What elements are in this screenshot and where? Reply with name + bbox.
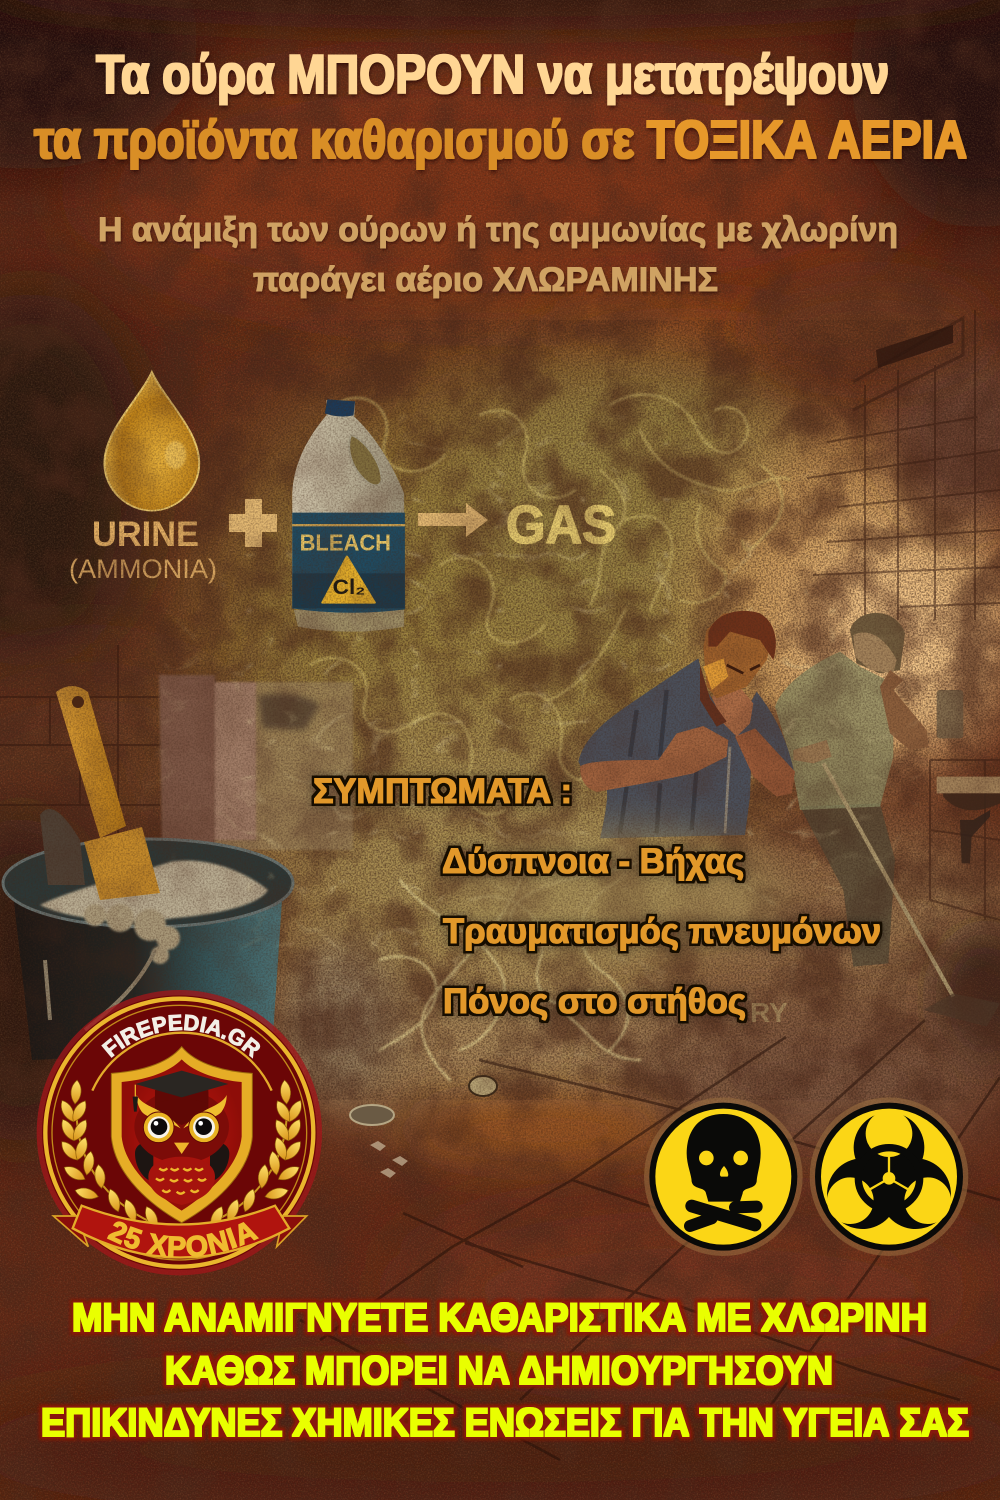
badge arc: [92, 1033, 272, 1091]
warning text: [41, 1296, 969, 1445]
ribbon text: 25 ΧΡΟΝΙΑ: [107, 1221, 259, 1257]
warning text: ΚΑΘΩΣ ΜΠΟΡΕΙ ΝΑ ΔΗΜΙΟΥΡΓΗΣΟΥΝ: [165, 1349, 833, 1393]
warning text: ΜΗΝ ΑΝΑΜΙΓΝΥΕΤΕ ΚΑΘΑΡΙΣΤΙΚΑ ΜΕ ΧΛΩΡΙΝΗ: [72, 1296, 927, 1340]
symptom: lung injury: Τραυματισμός πνευμόνων: [443, 912, 881, 951]
title: τα προϊόντα καθαρισμού σε ΤΟΞΙΚΑ ΑΕΡΙΑ: [34, 110, 967, 170]
arrow: [418, 503, 488, 537]
subtitle: Η ανάμιξη των ούρων ή της αμμωνίας με χλωρίνη: [98, 211, 898, 249]
symptom: chest pain: Πόνος στο στήθος: [443, 982, 746, 1021]
smoke veil over lower worker: [455, 830, 785, 960]
label: urine ammonia: URINE: [92, 515, 199, 554]
label: urine ammonia: (AMMONIA): [69, 554, 217, 584]
floor tiles: [300, 1020, 1000, 1460]
symptoms heading: ΣΥΜΠΤΩΜΑΤΑ :: [313, 772, 572, 811]
title: [34, 43, 967, 170]
badge: Firepedia 25 years: [36, 990, 322, 1276]
label: gas: GAS: [506, 495, 616, 555]
wall vent: [876, 325, 953, 368]
icon: bleach bottle: Cl₂: [333, 575, 365, 599]
icon: bleach bottle: [292, 399, 405, 632]
sink and fixtures on the right: [937, 690, 1000, 863]
urinal on the wall: [159, 675, 353, 850]
faint floor lettering: RY: [750, 997, 788, 1028]
subtitle: παράγει αέριο ΧΛΩΡΑΜΙΝΗΣ: [253, 261, 718, 299]
left wall tiles: [0, 645, 160, 850]
icon: urine drop: [104, 372, 199, 511]
symptom: dyspnea and cough: Δύσπνοια - Βήχας: [442, 842, 744, 881]
subtitle: [98, 211, 898, 299]
plus sign: [229, 499, 277, 547]
graduation cap: [133, 1071, 228, 1112]
wall tiles on the right: [807, 310, 1000, 920]
icon: bleach bottle: BLEACH: [300, 529, 391, 556]
symptoms list: [313, 772, 881, 1021]
badge name: FIREPEDIA.GR: [101, 1014, 260, 1059]
laurel wreath: [58, 1080, 305, 1232]
bright smoke curls over the floor: [380, 850, 660, 1080]
object grain overlay: [0, 320, 1000, 1100]
owl mascot: [134, 1090, 229, 1205]
front worker coughing: [578, 611, 795, 838]
icon: biohazard: [810, 1097, 968, 1256]
floor debris and pebbles: [350, 1076, 497, 1178]
smoke wisps: [158, 387, 920, 1060]
background worker with mop: [775, 613, 1000, 1027]
smoke curls: [310, 395, 790, 814]
ribbon: [51, 1204, 308, 1259]
shield: [111, 1047, 252, 1223]
bucket with scrub brush and foam: [3, 686, 293, 1060]
label: urine ammonia: [69, 515, 217, 584]
icon: skull hazard: [644, 1097, 803, 1256]
